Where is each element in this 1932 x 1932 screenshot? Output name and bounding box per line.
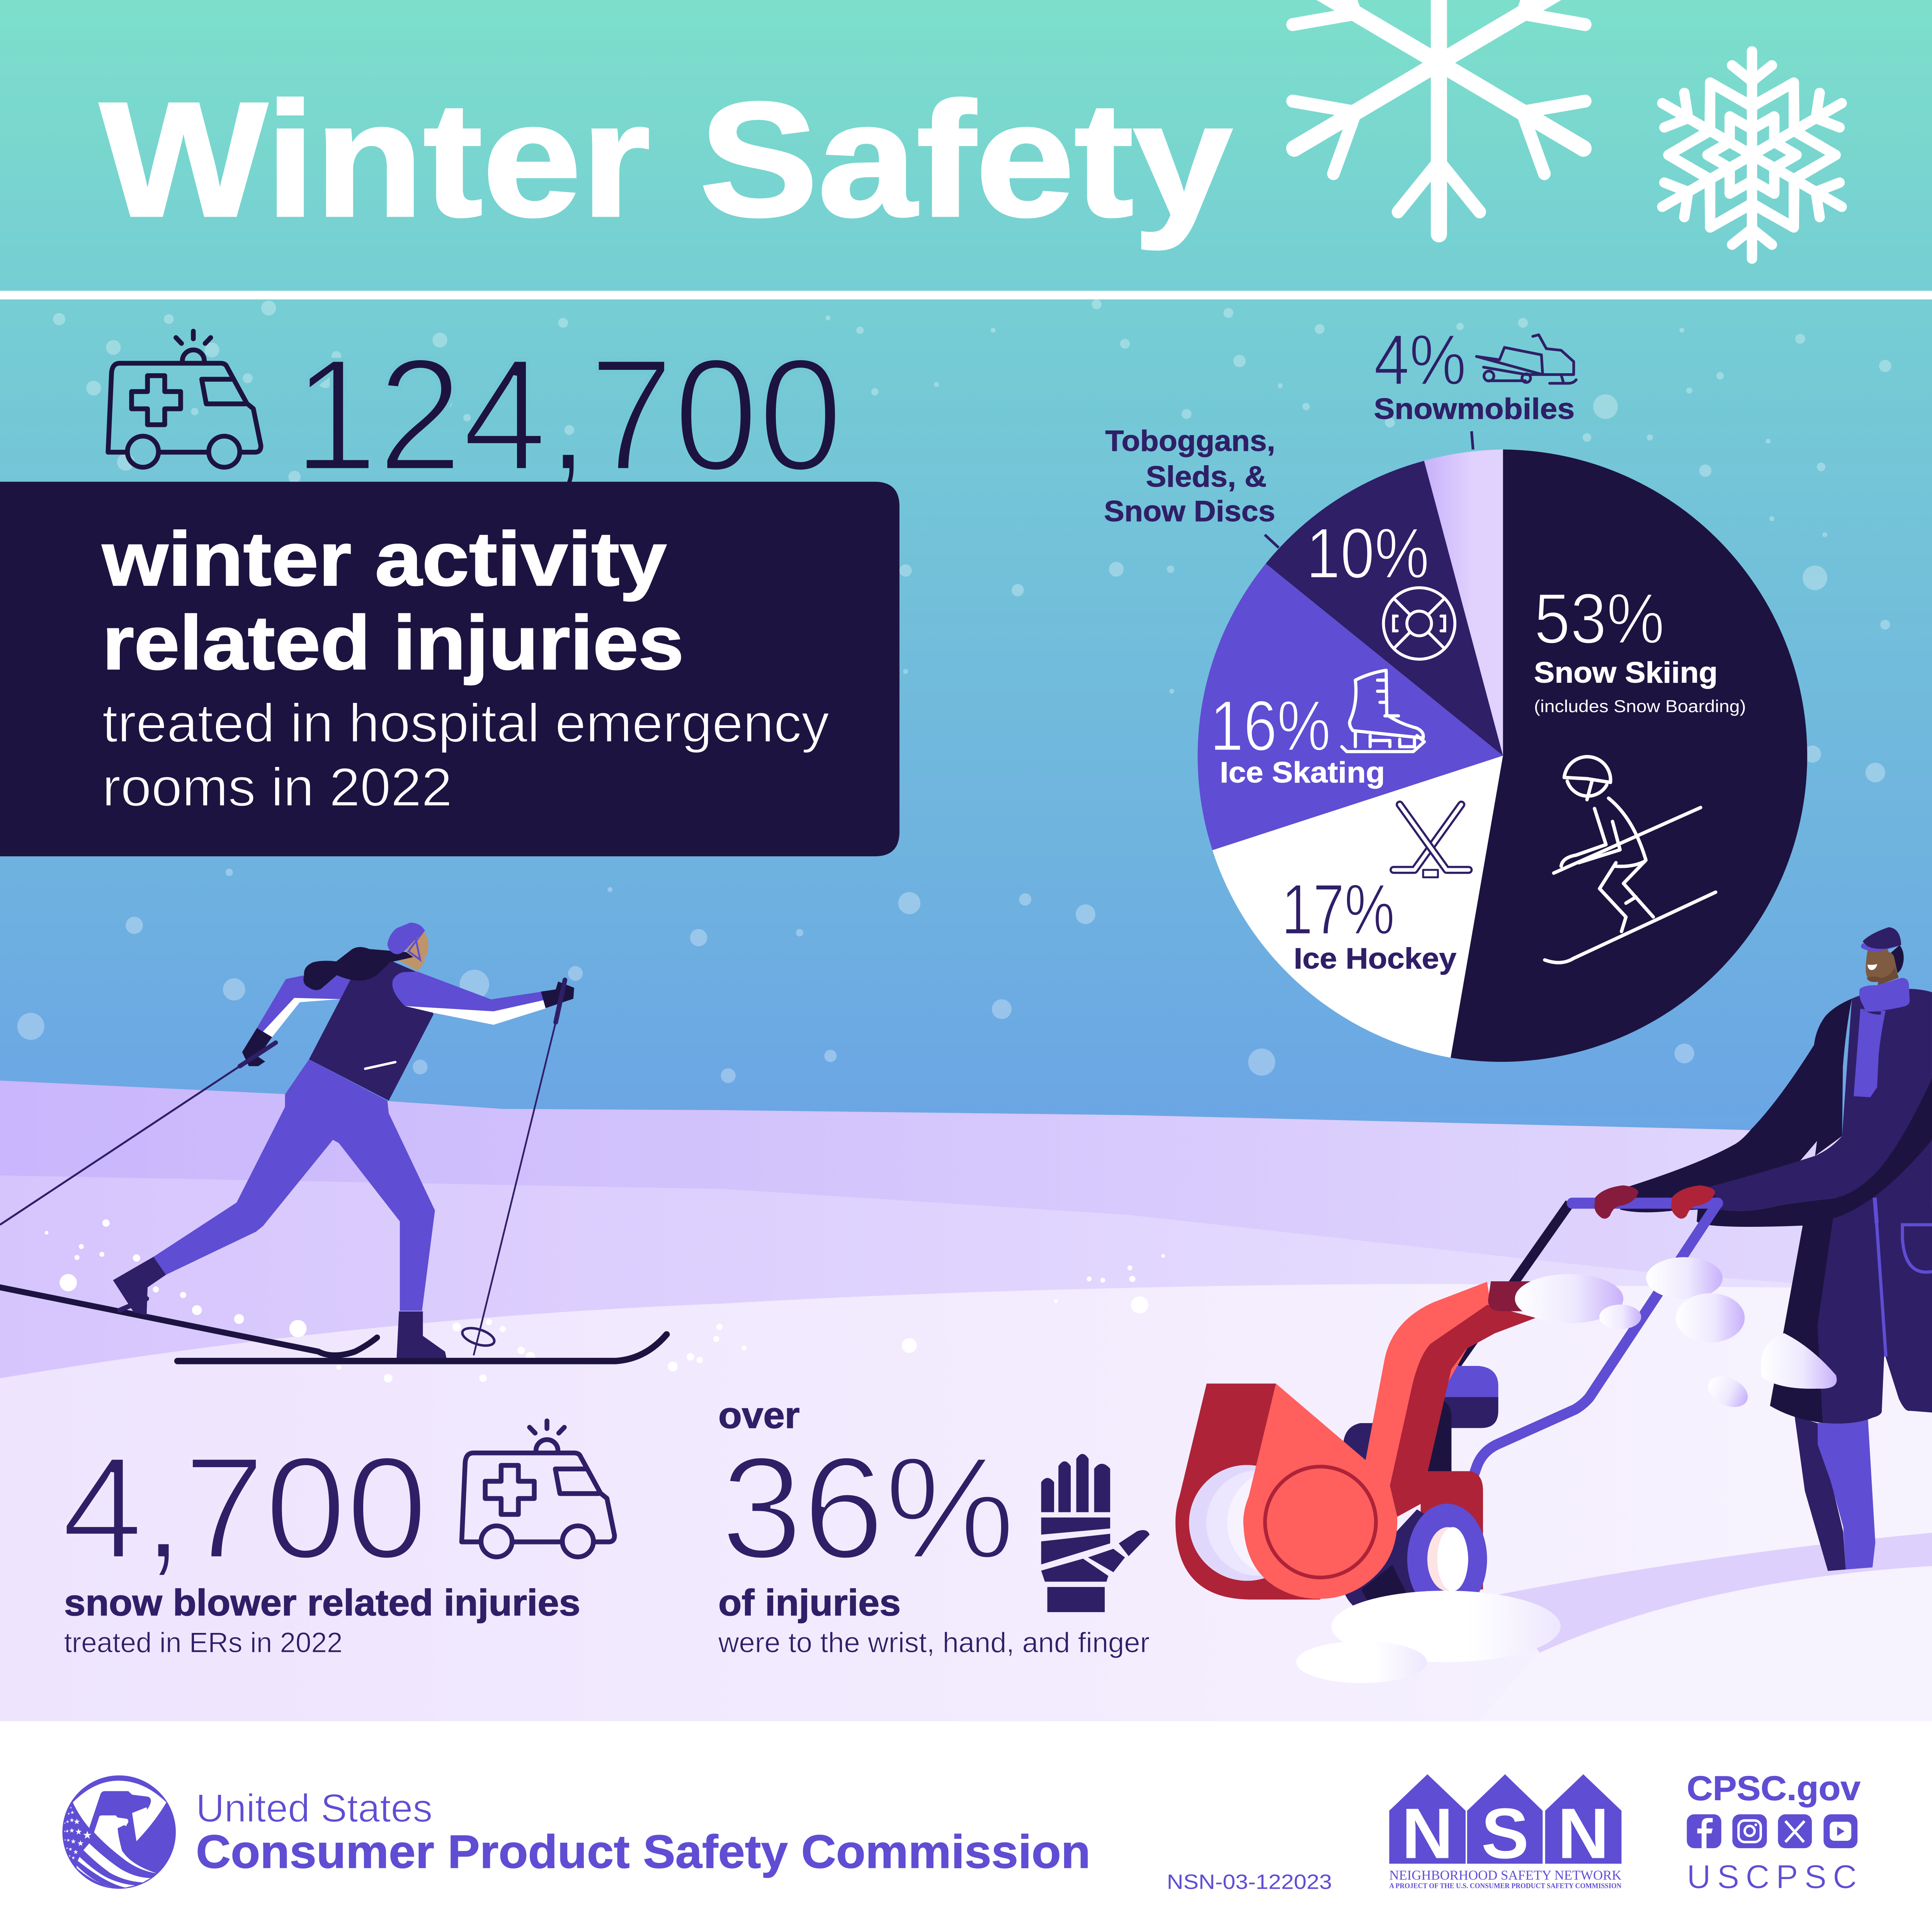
label: 4% snowmobiles: Snowmobiles	[1374, 393, 1575, 425]
man: scarf wrap	[1859, 978, 1910, 1012]
stat: 4,700 snow blower injuries: snow blower related injuries	[64, 1582, 580, 1623]
snow blower: wheel hub	[1427, 1527, 1468, 1591]
man: beard	[1867, 967, 1898, 985]
snow blower: rear block	[1343, 1423, 1380, 1473]
stat: 36% of injuries: of injuries	[718, 1582, 901, 1623]
label: toboggans, sleds, and snow discs: Sleds, &	[1146, 461, 1267, 493]
label: toboggans, sleds, and snow discs: Toboggans,	[1105, 425, 1275, 457]
man: pocket	[1902, 1225, 1932, 1272]
left arm	[257, 975, 353, 1032]
man: zip line	[1875, 1198, 1877, 1223]
label: 17% ice hockey: Ice Hockey	[1294, 942, 1457, 975]
snow blower: track shade	[1362, 1565, 1417, 1614]
logo: Neighborhood Safety Network: A PROJECT OF THE U.S. CONSUMER PRODUCT SAFETY COMMISSION	[1389, 1882, 1622, 1890]
snow blower: base	[1421, 1471, 1483, 1589]
stat: 4,700 snow blower injuries	[61, 1426, 580, 1658]
icon: ambulance small	[462, 1421, 614, 1557]
snow: drift under blower	[1332, 1591, 1561, 1662]
left arm stripe	[263, 998, 340, 1037]
label: 10% toboggans: 10%	[1306, 514, 1429, 594]
snow blower: grip bar	[1572, 1201, 1718, 1205]
heading: winter activity related injuries	[102, 516, 684, 685]
left pole grip	[240, 1043, 276, 1066]
front boot	[396, 1311, 446, 1358]
snow blower: track	[1343, 1509, 1466, 1626]
label: 53% snow skiing: (includes Snow Boarding)	[1534, 697, 1746, 716]
front ski	[177, 1334, 667, 1361]
goggle strap	[408, 930, 424, 960]
glove: left	[1594, 1185, 1638, 1219]
icon: large snowflake	[1274, 0, 1604, 234]
pie slice: ice skating 16%	[1197, 564, 1503, 850]
right glove	[541, 981, 574, 1008]
sky background	[0, 299, 1932, 1150]
text: publication code: NSN-03-122023	[1167, 1870, 1332, 1893]
illustration: person with snow blower	[1175, 927, 1932, 1683]
stat: 4,700 snow blower injuries: 4,700	[61, 1426, 428, 1589]
icon: ice skate	[1342, 670, 1424, 752]
snow blower: chute shade	[1390, 1305, 1536, 1517]
pole basket	[460, 1325, 497, 1349]
stat: 36% of injuries: 36%	[721, 1426, 1015, 1589]
label: toboggans, sleds, and snow discs	[1104, 425, 1275, 528]
text: treated in hospital emergency rooms in 2022: treated in hospital emergency	[102, 693, 829, 753]
snow blower: engine top	[1442, 1366, 1498, 1397]
label: 17% ice hockey: 17%	[1281, 870, 1395, 949]
pie chart: winter activity injury shares	[1197, 449, 1807, 1062]
leader line: snowmobiles	[1471, 431, 1473, 449]
heading: winter activity related injuries: winter activity	[102, 516, 667, 602]
icon: snowmobile	[1476, 335, 1576, 383]
pants	[153, 1059, 435, 1311]
panel: winter activity injuries	[0, 482, 900, 856]
snow blower: purple arm	[1469, 1203, 1718, 1488]
snow blower: wheel hub highlight	[1437, 1527, 1468, 1591]
man: upper body	[1620, 927, 1932, 1227]
pie slice: ice hockey 17%	[1213, 756, 1503, 1058]
header band	[0, 0, 1932, 291]
heading: winter activity related injuries: related injuries	[102, 600, 684, 685]
icon: snow disc	[1383, 588, 1455, 659]
label: 17% ice hockey	[1281, 870, 1457, 975]
icon: bandaged hand	[1041, 1454, 1150, 1612]
right arm	[392, 971, 546, 1011]
man: pants dark leg	[1794, 1416, 1846, 1571]
man: coat zip lower	[1877, 1222, 1886, 1357]
man: front sleeve	[1710, 1078, 1932, 1211]
title: Winter Safety	[100, 69, 1233, 251]
helmet	[388, 923, 424, 954]
man: pants light leg	[1818, 1419, 1875, 1570]
leader line: toboggans	[1265, 535, 1279, 548]
text: treated in hospital emergency rooms in 2022: rooms in 2022	[102, 757, 452, 817]
label: 16% ice skating	[1210, 686, 1385, 789]
pie slice: toboggans 10%	[1266, 461, 1503, 756]
snow: flying clump 5	[1703, 1371, 1753, 1413]
snow: flying clump 6	[1599, 1304, 1641, 1329]
icon: skier	[1545, 757, 1716, 963]
man: face	[1866, 949, 1898, 985]
snow: flying clump 1	[1515, 1274, 1623, 1323]
label: toboggans, sleds, and snow discs: Snow Discs	[1104, 495, 1275, 528]
snow blower: dark handle bar	[1456, 1203, 1570, 1364]
text: CPSC.gov: CPSC.gov	[1687, 1769, 1861, 1808]
glove: right	[1671, 1185, 1715, 1219]
logo: Neighborhood Safety Network	[1389, 1774, 1622, 1890]
right pole	[474, 1022, 556, 1355]
label: 16% ice skating: Ice Skating	[1220, 756, 1385, 789]
pie slice: snowmobiles 4%	[1424, 449, 1503, 756]
big stat: 124,700: 124,700	[293, 325, 843, 504]
man: lower coat	[1817, 1208, 1932, 1423]
stat: 36% of injuries: were to the wrist, hand, and finger	[718, 1627, 1150, 1658]
label: 16% ice skating: 16%	[1210, 686, 1331, 766]
right arm stripe	[405, 1000, 546, 1025]
text: Consumer Product Safety Commission: Consumer Product Safety Commission	[196, 1825, 1090, 1878]
label: 4% snowmobiles: 4%	[1374, 320, 1466, 400]
back boot	[113, 1257, 166, 1315]
snow blower: engine middle	[1439, 1397, 1498, 1428]
hill: middle	[0, 1175, 1932, 1478]
snow blower: auger hub ring	[1265, 1467, 1376, 1578]
stat: 36% of injuries: over	[718, 1395, 800, 1436]
binding	[120, 1299, 146, 1310]
snow blower: chute cap	[1488, 1281, 1541, 1311]
icon: ambulance	[108, 331, 261, 467]
vest	[309, 961, 434, 1101]
icon: crossed hockey sticks	[1394, 804, 1469, 877]
man: cap band	[1861, 943, 1901, 951]
man: hair	[1891, 945, 1904, 973]
hill: lower right white drift	[1479, 1566, 1932, 1721]
neck	[398, 944, 425, 971]
hair	[305, 948, 410, 989]
logo: Neighborhood Safety Network: NEIGHBORHOOD SAFETY NETWORK	[1389, 1867, 1621, 1883]
logo: Neighborhood Safety Network: S	[1481, 1794, 1529, 1874]
icon: small snowflake	[1641, 51, 1862, 259]
hill: lower right lavender	[1500, 1533, 1932, 1653]
falling snow dots	[17, 299, 1891, 1083]
text: United States: United States	[196, 1786, 432, 1830]
snow blower: housing	[1175, 1384, 1320, 1600]
icons: social media	[1687, 1814, 1857, 1848]
text: USCPSC handle: USCPSC	[1687, 1859, 1857, 1896]
right pole grip	[556, 980, 565, 1022]
stat: 4,700 snow blower injuries: treated in ERs in 2022	[64, 1627, 342, 1658]
logo: CPSC seal	[62, 1776, 176, 1889]
pie slice: snow skiing 53%	[1451, 449, 1807, 1062]
snow blower: auger discs	[1189, 1465, 1336, 1581]
man: lower coat shadow	[1770, 1214, 1836, 1423]
vest zip	[365, 1062, 395, 1069]
man: smile	[1867, 964, 1877, 970]
illustration: cross-country skier	[0, 923, 667, 1361]
snow: flying clump 2	[1646, 1257, 1723, 1299]
back ski	[0, 1287, 377, 1355]
snow blower: engine block	[1417, 1400, 1451, 1474]
snow: flying clump 3	[1676, 1293, 1745, 1342]
label: 53% snow skiing: 53%	[1534, 579, 1665, 659]
man: coat body	[1835, 989, 1932, 1223]
hill: foreground	[0, 1284, 1932, 1721]
man: gap between sleeve and body	[1800, 1141, 1817, 1161]
man: back sleeve	[1620, 996, 1859, 1216]
stat: 36% of injuries	[718, 1395, 1150, 1658]
snow: small drift	[1296, 1641, 1427, 1683]
man: scarf hanging end	[1854, 1009, 1886, 1097]
man: sleeve shadow	[1697, 1078, 1932, 1227]
left glove	[242, 1028, 272, 1066]
left pole	[0, 1066, 240, 1225]
label: 53% snow skiing	[1534, 579, 1746, 716]
face	[406, 928, 429, 963]
label: 4% snowmobiles	[1374, 320, 1575, 425]
ground snow sparkles	[45, 1219, 1165, 1383]
snow blower: chute front	[1243, 1282, 1491, 1599]
label: 53% snow skiing: Snow Skiing	[1534, 656, 1718, 689]
logo: Neighborhood Safety Network: N	[1558, 1794, 1609, 1874]
man: scarf fold	[1861, 1008, 1881, 1015]
snow blower: wheel	[1407, 1504, 1487, 1615]
hill: far	[0, 1081, 1932, 1355]
logo: Neighborhood Safety Network: N	[1401, 1794, 1453, 1874]
text: treated in hospital emergency rooms in 2022	[102, 693, 829, 817]
snow: flying clump 4	[1761, 1333, 1837, 1389]
man: cap	[1863, 927, 1901, 949]
